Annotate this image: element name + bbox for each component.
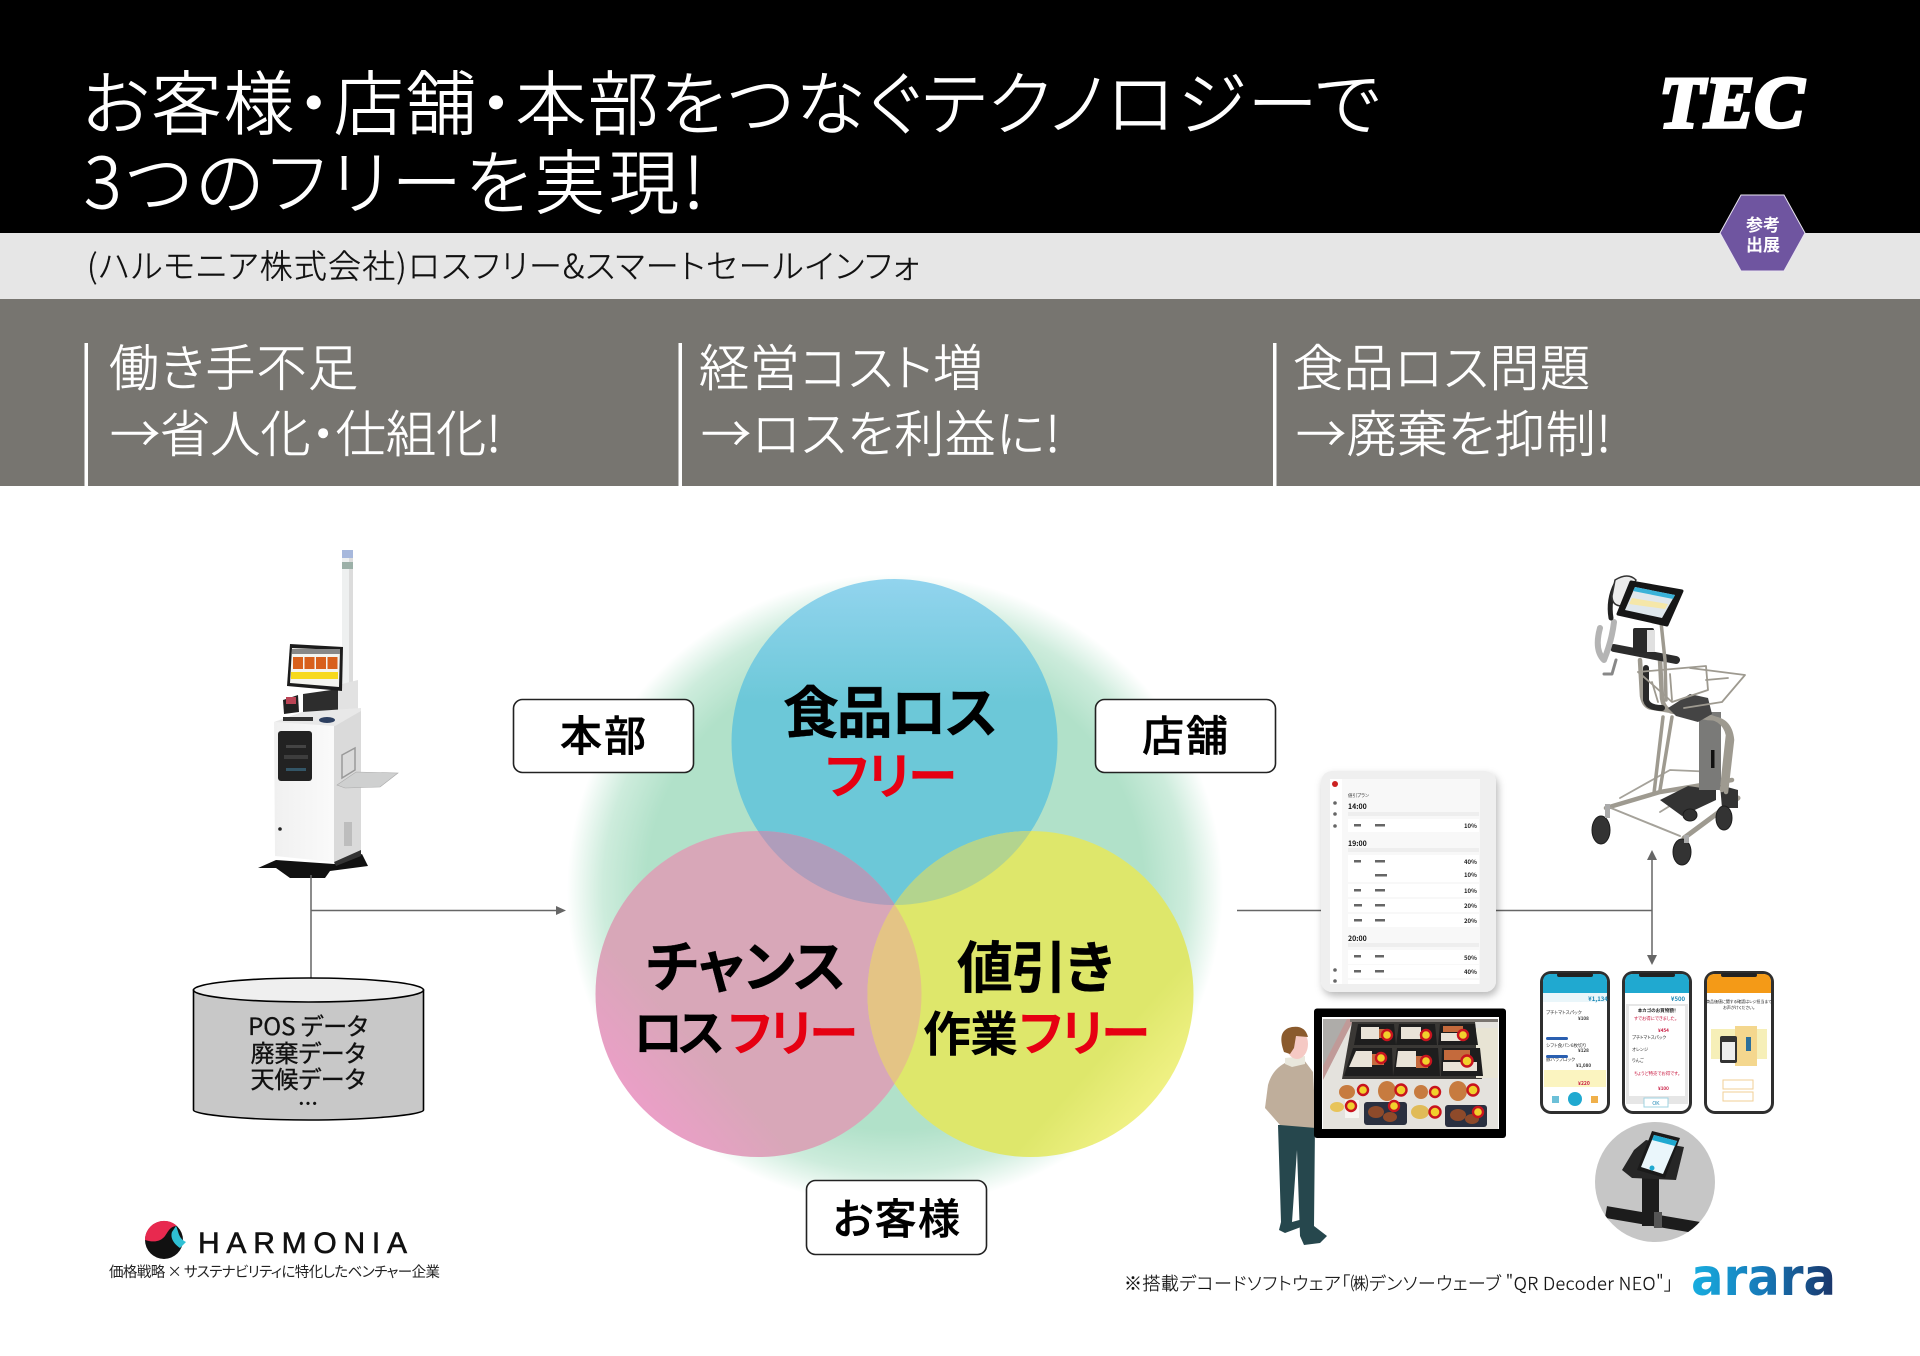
database cylinder: … [298,1088,318,1117]
phone 1: ¥1,134 [1588,994,1608,1003]
phone 1: シフト食パン6枚切り [1546,1042,1586,1049]
text: food loss free: 食品ロス [783,669,998,750]
challenge: food loss: 食品ロス問題 [1293,329,1590,401]
center scanner [1633,628,1654,653]
label: customer: お客様 [833,1186,960,1247]
venn diagram [567,574,1223,1206]
phone 2: 本カゴのお買物額！ [1638,1007,1676,1014]
phone 2: ちょうど特売でお得です。 [1634,1070,1680,1077]
phone 2 [1622,971,1692,1114]
tablet: markdown plan screen: 19:00 [1348,839,1367,849]
phone 2: ¥500 [1671,994,1686,1003]
tablet: markdown plan screen: 値引プラン [1348,792,1370,799]
challenge: rising cost: 経営コスト増 [699,329,983,401]
panel: challenges band [0,299,1920,486]
person: customer at monitor [1265,1027,1348,1245]
phone 1 [1540,971,1610,1114]
phone mount [1595,1122,1715,1242]
circle: chance loss [596,831,922,1157]
phone 1: ¥128 [1578,1048,1589,1054]
tablet: markdown plan screen: 10% [1464,821,1477,830]
wheels [1592,816,1610,844]
text: chance loss free [633,923,858,1066]
logo: Harmonia: HARMONIA [198,1227,407,1260]
upper basket [1638,666,1745,708]
badge: reference exhibit [1720,195,1805,271]
overlap: food and chance [758,831,894,905]
challenge: rising cost [699,329,1060,467]
logo: arara: arara [1691,1248,1836,1308]
challenge: labour shortage: →省人化・仕組化! [110,395,501,467]
text: markdown work free: 作業 [923,995,1018,1065]
phone 3: 商品価値に関する確認はレジ担当まで [1706,998,1772,1005]
header band [0,0,1920,233]
phone 2: すでお得にできました。 [1634,1015,1677,1022]
top tablet [1610,584,1616,618]
title [82,49,1380,229]
sale stickers [1346,1030,1483,1118]
phone 1: プチトマトスパック [1546,1010,1582,1016]
logo: TEC: TEC [1659,62,1805,143]
tablet: markdown plan screen: 40% [1464,967,1477,976]
database cylinder: 廃棄データ [250,1034,366,1069]
overlap: food and markdown [894,831,1031,905]
text: markdown work free: フリー [1019,994,1150,1066]
text: food loss free: フリー [825,737,957,809]
tablet: markdown plan screen: 20% [1464,916,1477,925]
footnote: ※搭載デコードソフトウェア「㈱デンソーウェーブ "QR Decoder NEO"」 [1124,1270,1673,1296]
phone 3: お声がけください。 [1723,1004,1755,1011]
phone 2: ¥100 [1658,1086,1669,1092]
subtitle band [0,233,1920,299]
challenge: labour shortage: 働き手不足 [109,329,358,401]
challenge: food loss [1293,329,1611,467]
kiosk: self checkout terminal [258,550,398,878]
text: markdown work free: 値引き [957,924,1114,1005]
text: food loss free [783,669,998,809]
phone 1: ¥1,080 [1576,1063,1591,1069]
challenge: food loss: →廃棄を抑制! [1296,395,1611,467]
phones: app screens [1540,971,1774,1114]
text: chance loss free: フリー [728,994,858,1066]
overlap: chance and markdown [868,904,922,1084]
cart: smart shopping cart [1592,576,1745,865]
challenge: labour shortage [109,329,501,467]
phone 1: ¥108 [1578,1016,1589,1022]
database cylinder [194,978,424,1120]
database cylinder: 天候データ [250,1060,366,1095]
tablet: markdown plan screen: 20% [1464,901,1477,910]
background glow [567,574,1223,1206]
bento trays [1344,1024,1483,1076]
logo: Harmonia: 価格戦略 × サステナビリティに特化したベンチャー企業 [109,1261,440,1282]
label: store [1096,700,1276,772]
tablet: markdown plan screen: 10% [1464,870,1477,879]
challenge: rising cost: →ロスを利益に! [701,395,1060,467]
circle: food loss [732,579,1058,905]
label: customer [806,1180,986,1254]
label: headquarters [514,700,694,772]
tablet: markdown plan screen: 14:00 [1348,802,1367,812]
tablet: markdown plan screen: 20:00 [1348,934,1367,944]
connector: kiosk to hub arrow [311,875,566,978]
phone 2: プチトマトスパック [1632,1035,1666,1041]
tablet: markdown plan screen: 10% [1464,886,1477,895]
connector: store line and double arrow [1237,850,1657,965]
phone 2: OK [1652,1101,1660,1107]
phone 2: オレンジ [1632,1047,1649,1053]
phone 2: りんご [1632,1057,1645,1064]
title: お客様・店舗・本部をつなぐテクノロジーで [82,49,1380,150]
lower frame [1606,780,1732,808]
tablet: markdown plan screen: 50% [1464,953,1477,962]
phone 1: 豚バラブロック [1546,1056,1575,1063]
subtitle: (ハルモニア株式会社)ロスフリー&スマートセールインフォ [87,240,919,288]
logo: Harmonia [109,1221,440,1282]
label: headquarters: 本部 [560,703,646,764]
text: markdown work free [923,924,1150,1066]
phone 1: ¥220 [1578,1080,1590,1087]
database cylinder: POS データ [248,1007,368,1042]
text: chance loss free: ロス [633,994,725,1066]
fried foods [1339,1081,1467,1101]
tablet: markdown plan screen: 40% [1464,857,1477,866]
phone 2: ¥454 [1658,1028,1669,1034]
badge: reference exhibit: 参考 [1746,211,1780,236]
handlebar [1614,648,1676,660]
text: chance loss free: チャンス [646,923,846,1004]
title: 3つのフリーを実現! [84,128,704,229]
badge: reference exhibit: 出展 [1746,231,1780,256]
tablet: markdown plan screen [1321,771,1496,992]
circle: markdown work [868,831,1194,1157]
coil cord [1598,622,1614,660]
label: store: 店舗 [1142,703,1228,764]
phone 3 [1704,971,1774,1114]
monitor: store shelf display [1314,1008,1506,1138]
